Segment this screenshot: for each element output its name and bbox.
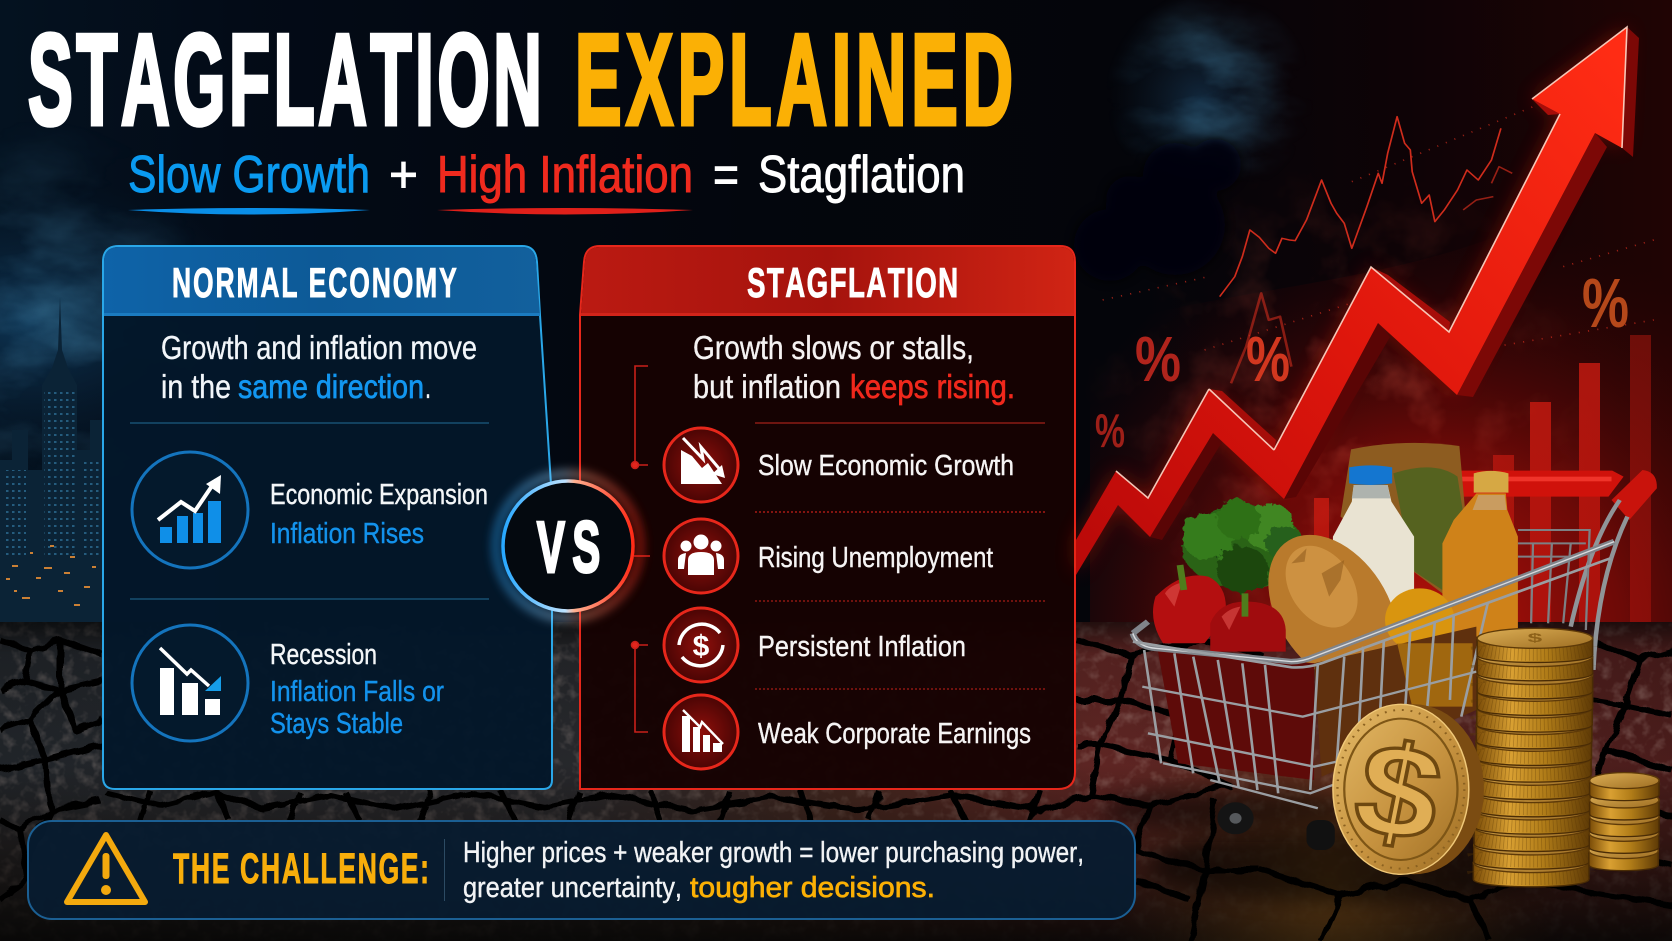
background: city skyline — [0, 297, 103, 622]
text: challenge description: Higher prices + weaker growth = lower purchasing power, — [463, 837, 1084, 869]
subtitle equation: Slow Growth — [128, 146, 370, 204]
vs badge: VS — [537, 508, 600, 588]
basket contents — [1157, 627, 1476, 780]
callout: the challenge — [28, 821, 1135, 919]
arrow side faces — [1150, 27, 1639, 540]
oil bottle — [1442, 471, 1518, 637]
background: faint stock chart and percent signs: % — [1246, 323, 1290, 395]
text: stagflation description — [693, 329, 1015, 405]
subtitle equation: High Inflation — [437, 146, 693, 204]
title: EXPLAINED — [575, 7, 1013, 151]
grocery bag — [1340, 443, 1465, 593]
text: recession: Inflation Falls or — [270, 676, 444, 708]
icon: slow economic growth — [664, 428, 738, 502]
small coin stack — [1589, 773, 1659, 871]
text: stagflation description: Growth slows or stalls, — [693, 329, 974, 366]
background: faint stock chart and percent signs: % — [1095, 404, 1125, 457]
subtitle equation — [128, 146, 965, 214]
text: weak corporate earnings: Weak Corporate Earnings — [758, 718, 1031, 750]
text: normal economy description: same direction — [238, 368, 424, 405]
subtitle equation: Stagflation — [758, 146, 965, 204]
icon: rising unemployment — [664, 519, 738, 593]
text: stagflation description: keeps rising. — [850, 368, 1015, 405]
text: economic expansion: Economic Expansion — [270, 479, 488, 511]
arrow front face — [1076, 27, 1627, 575]
text: recession: Recession — [270, 639, 377, 671]
panel header: stagflation: STAGFLATION — [747, 259, 958, 306]
icon: economic expansion chart — [132, 452, 248, 568]
text: the challenge label: THE CHALLENGE: — [173, 845, 429, 893]
cart handle — [1461, 470, 1657, 670]
background: cracked earth — [0, 622, 1672, 941]
text: recession: Stays Stable — [270, 708, 403, 740]
text: recession — [270, 639, 444, 740]
large dollar coin — [1333, 704, 1484, 874]
icon: recession chart — [132, 625, 248, 741]
milk bottle — [1333, 465, 1414, 617]
red rising arrow — [1076, 27, 1639, 575]
basket wires — [1133, 542, 1614, 808]
background: faint stock chart and percent signs: % — [1582, 264, 1629, 342]
text: normal economy description: . — [425, 368, 431, 405]
shopping cart with groceries and coins — [1133, 443, 1659, 887]
background: faint stock chart and percent signs — [1095, 107, 1654, 622]
title — [28, 7, 1013, 152]
cart wheels — [1217, 802, 1335, 850]
coin stack: $ — [1528, 631, 1543, 645]
icon: warning triangle — [67, 835, 145, 902]
icon: weak corporate earnings — [664, 695, 738, 769]
peppers — [1153, 565, 1286, 652]
text: stagflation description: but inflation — [693, 368, 841, 405]
large dollar coin: $ — [1344, 714, 1453, 870]
text: normal economy description — [161, 329, 477, 405]
panel header: stagflation — [581, 247, 1074, 316]
text: persistent inflation: Persistent Inflation — [758, 631, 966, 663]
subtitle equation: + — [389, 146, 418, 204]
panel: stagflation — [580, 246, 1075, 789]
text: rising unemployment: Rising Unemployment — [758, 542, 993, 574]
text: challenge description: greater uncertainty, — [463, 872, 682, 904]
text: challenge description: tougher decisions. — [690, 872, 935, 904]
lemon — [1385, 588, 1454, 652]
bread loaf — [1242, 516, 1424, 704]
text: economic expansion — [270, 479, 488, 550]
lettuce — [1182, 501, 1303, 593]
coin stack — [1473, 628, 1593, 887]
text: normal economy description: Growth and inflation move — [161, 329, 477, 366]
text: economic expansion: Inflation Rises — [270, 518, 424, 550]
connector lines — [632, 366, 650, 732]
title: STAGFLATION — [28, 7, 542, 152]
vs badge — [496, 474, 640, 618]
back of basket — [1518, 530, 1590, 630]
icon: persistent inflation: $ — [693, 630, 710, 663]
text: slow economic growth: Slow Economic Growth — [758, 450, 1014, 482]
text: challenge description — [463, 837, 1084, 904]
panel header: normal economy — [104, 247, 540, 316]
text: normal economy description: in the — [161, 368, 231, 405]
subtitle equation: = — [713, 146, 739, 204]
panel: normal economy — [103, 246, 552, 789]
background: stormy sky, split blue and red — [0, 0, 1672, 622]
background: faint stock chart and percent signs: % — [1135, 323, 1181, 395]
icon: persistent inflation — [664, 608, 738, 682]
panel header: normal economy: NORMAL ECONOMY — [172, 260, 457, 307]
